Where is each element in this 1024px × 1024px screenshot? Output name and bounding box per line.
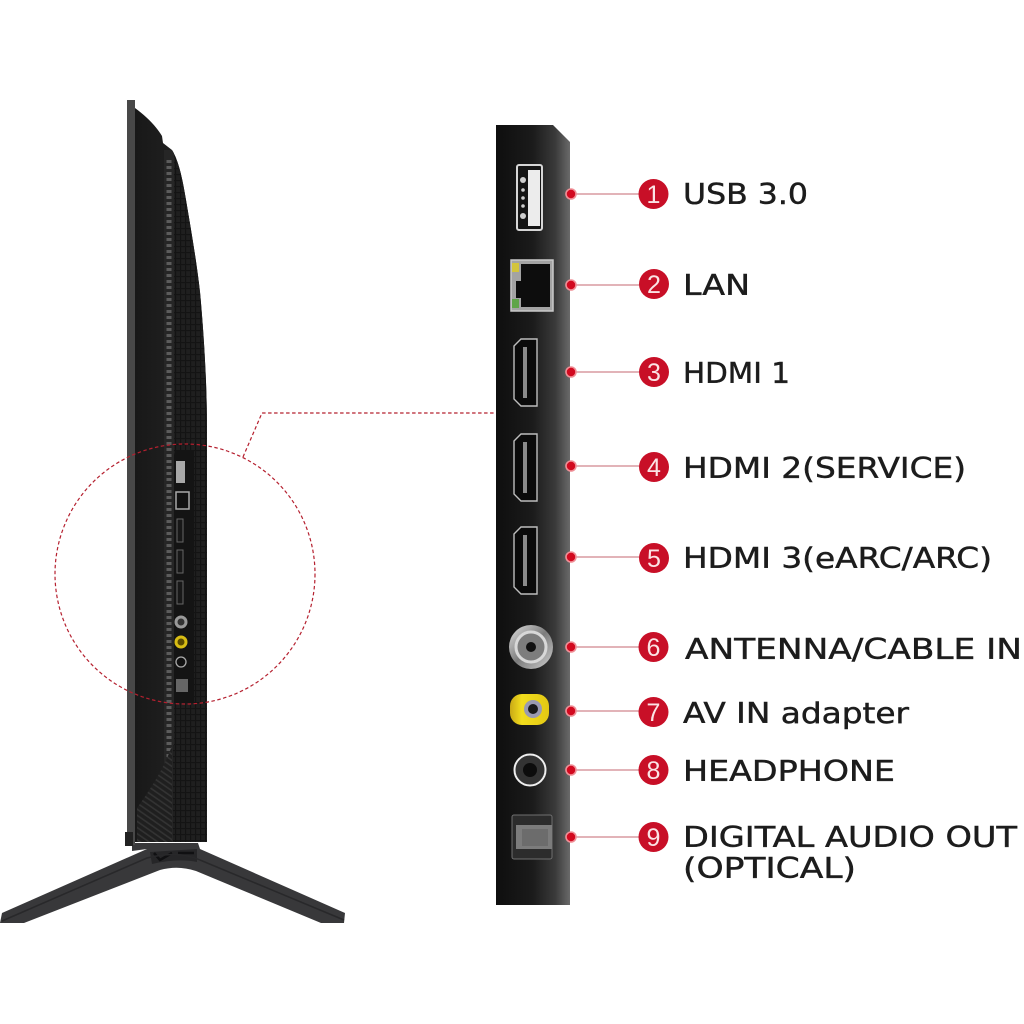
- callout 9: digital audio: DIGITAL AUDIO OUT: [683, 821, 1018, 854]
- callout 7: AV: AV IN adapter: [683, 697, 909, 730]
- callout 9: digital audio: (OPTICAL): [683, 852, 856, 885]
- zoom callout circle: [55, 413, 496, 704]
- port: optical: [512, 815, 552, 859]
- callout 4: HDMI 2: 4: [647, 454, 661, 482]
- callout 8: headphone: 8: [647, 757, 660, 785]
- bezel foot: [125, 832, 133, 846]
- front bezel: [127, 100, 135, 845]
- port: AV: [510, 694, 549, 725]
- vent column: [166, 150, 174, 757]
- port: HDMI 1: [514, 339, 537, 406]
- callout 1: USB 3.0: [566, 178, 808, 211]
- rear grille texture: [173, 152, 207, 745]
- port: headphone: [514, 754, 546, 786]
- rear body: [135, 100, 208, 845]
- port: USB 3.0: [517, 165, 542, 230]
- callout 9: digital audio: 9: [647, 824, 660, 852]
- callout 6: antenna: 6: [647, 634, 660, 662]
- callout 2: LAN: 2: [647, 271, 661, 299]
- callout 1: USB 3.0: 1: [647, 181, 660, 209]
- port: antenna: [509, 625, 553, 669]
- callout 7: AV: 7: [647, 699, 660, 727]
- TV stand: [0, 843, 345, 923]
- port: HDMI 2: [514, 434, 537, 501]
- stand hub detail: [2, 849, 344, 921]
- callout 6: antenna: ANTENNA/CABLE IN: [685, 633, 1022, 666]
- callout 2: LAN: [566, 269, 750, 302]
- callout 7: AV: [566, 697, 909, 730]
- callout 5: HDMI 3: [566, 542, 992, 575]
- callout 1: USB 3.0: USB 3.0: [683, 178, 808, 211]
- callout 4: HDMI 2: HDMI 2(SERVICE): [683, 452, 966, 485]
- callout 3: HDMI 1: 3: [647, 359, 661, 387]
- port panel: [496, 125, 570, 905]
- port recess: [174, 450, 194, 702]
- lower rear block: [173, 745, 207, 842]
- callout 4: HDMI 2: [566, 452, 966, 485]
- callout 8: headphone: [566, 755, 895, 788]
- callout 6: antenna: [566, 632, 1022, 666]
- port: LAN: [511, 260, 553, 311]
- TV side view: [0, 100, 345, 923]
- callout 5: HDMI 3: 5: [647, 545, 661, 573]
- callout 9: digital audio: [566, 821, 1018, 885]
- callout 3: HDMI 1: HDMI 1: [683, 357, 790, 390]
- callout 5: HDMI 3: HDMI 3(eARC/ARC): [683, 542, 992, 575]
- callout 2: LAN: LAN: [683, 269, 750, 302]
- callout 8: headphone: HEADPHONE: [683, 755, 895, 788]
- port: HDMI 3: [514, 527, 537, 594]
- miniature ports: [176, 461, 189, 692]
- stand neck cover: [137, 745, 172, 842]
- callout 3: HDMI 1: [566, 357, 790, 390]
